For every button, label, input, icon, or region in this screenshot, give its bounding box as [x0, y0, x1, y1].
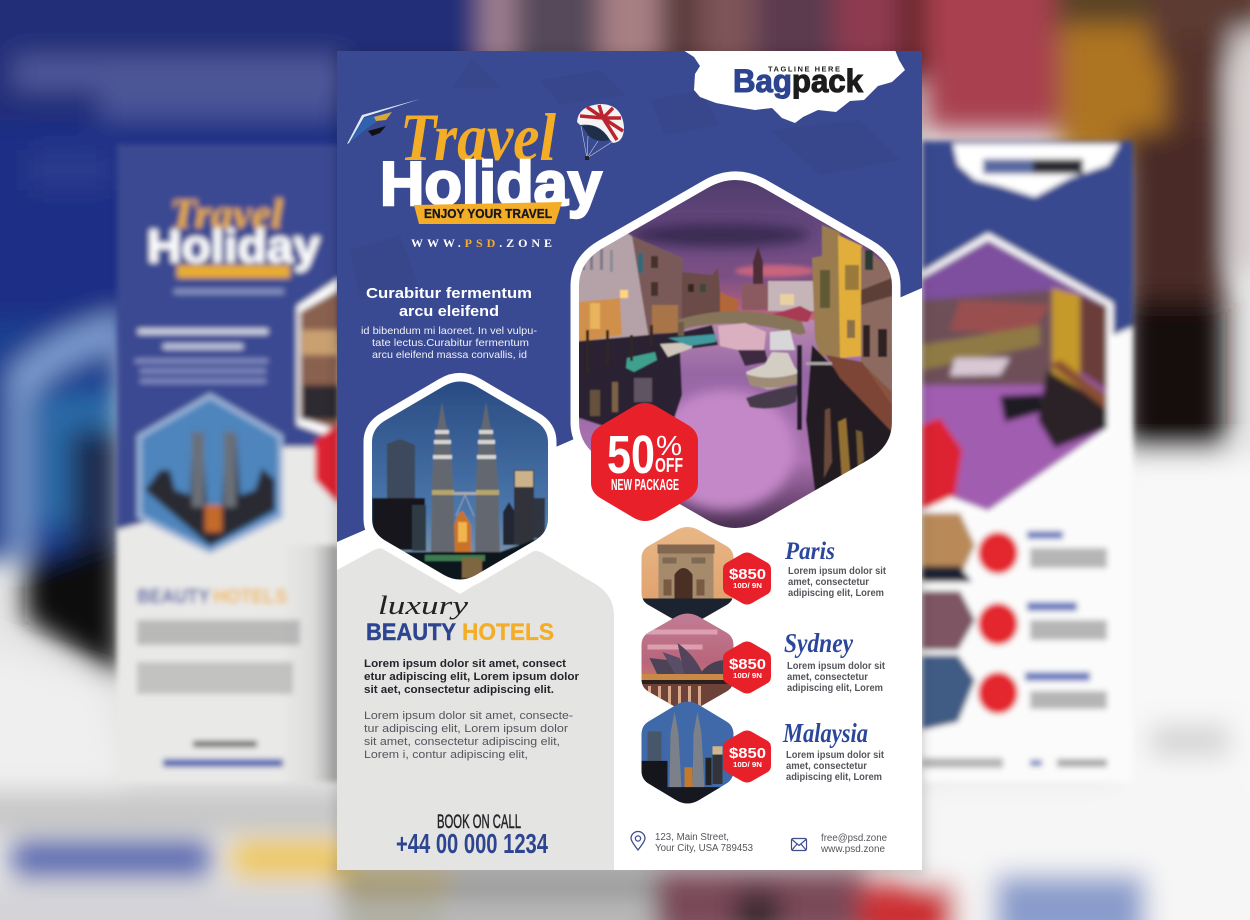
photo: Venice canal (big hexagon) [570, 170, 900, 535]
hotels bold text [364, 658, 580, 696]
photo: Arc de Triomphe [642, 527, 734, 619]
blurred left flyer: Travel [170, 192, 283, 238]
photo: Petronas towers (small hexagon) [360, 370, 560, 590]
price badge: Malaysia: 10D/ 9N [733, 760, 762, 769]
badge: 50% off [591, 403, 698, 521]
price badge: Malaysia: $850 [729, 746, 766, 762]
boat [746, 352, 799, 389]
blurred right flyer [922, 141, 1133, 782]
main flyer [337, 50, 922, 870]
heading: luxury script: luxury [378, 591, 469, 620]
email and web [820, 833, 888, 855]
destination: Paris: Lorem ipsum dolor sit [788, 566, 887, 577]
destination: Sydney [784, 628, 886, 694]
icon: envelope [792, 838, 806, 850]
hotels body text: Lorem ipsum dolor sit amet, consecte- [364, 710, 573, 722]
email and web: www.psd.zone [820, 844, 886, 855]
flyer shadow [333, 48, 926, 874]
hotels bold text: etur adipiscing elit, Lorem ipsum dolor [364, 671, 580, 683]
booking call to action: BOOK ON CALL [437, 811, 521, 833]
right brown building [860, 246, 892, 392]
intro body text: tate lectus.Curabitur fermentum [372, 337, 529, 349]
torn white logo patch [683, 50, 905, 123]
banner: enjoy your travel: ENJOY YOUR TRAVEL [424, 207, 552, 221]
website: WWW. PSD .ZONE [411, 236, 552, 250]
heading: beauty hotels: BEAUTY [366, 619, 456, 646]
hotels body text: sit amet, consectetur adipiscing elit, [364, 736, 560, 748]
destination: Malaysia: adipiscing elit, Lorem [786, 772, 882, 783]
address: Your City, USA 789453 [655, 843, 754, 854]
yellow building [812, 225, 840, 358]
heading: beauty hotels: HOTELS [462, 619, 554, 646]
intro body text: arcu eleifend massa convallis, id [372, 349, 527, 361]
hotels body text: Lorem i, contur adipiscing elit, [364, 749, 528, 761]
left dock and reflections [579, 324, 718, 426]
embankment and dark reflections [806, 345, 892, 492]
booking call to action [396, 814, 548, 854]
destination: Sydney: adipiscing elit, Lorem [787, 683, 883, 694]
destination: Malaysia [782, 718, 885, 783]
blurred left flyer [117, 144, 339, 782]
pale water under bridge [718, 323, 766, 350]
buildings left [579, 233, 649, 342]
logo tagline: TAGLINE HERE [768, 64, 840, 74]
bridge [677, 311, 806, 335]
small boats [626, 352, 657, 372]
destination: Paris: amet, consectetur [788, 577, 869, 588]
hotels body text [364, 710, 573, 761]
destination: Malaysia: Lorem ipsum dolor sit [786, 750, 885, 761]
email and web: free@psd.zone [821, 833, 888, 844]
badge: 50% off: OFF [655, 455, 683, 477]
price badge: Sydney: 10D/ 9N [733, 671, 762, 680]
destination: Paris: adipiscing elit, Lorem [788, 588, 884, 599]
church tower [752, 246, 764, 285]
badge: 50% off: % [656, 430, 682, 461]
booking call to action: +44 00 000 1234 [396, 828, 548, 859]
photo: Kuala Lumpur [642, 702, 734, 804]
logo wordmark: Bagpack [733, 63, 863, 99]
icon: hang glider [347, 99, 420, 144]
hotels body text: tur adipiscing elit, Lorem ipsum dolor [364, 723, 568, 735]
heading: beauty hotels [367, 623, 554, 640]
grey panel: luxury hotels [337, 548, 614, 870]
address [655, 832, 754, 854]
blurred left flyer: Holiday [147, 220, 320, 272]
intro heading: arcu eleifend [399, 303, 499, 320]
destination: Malaysia: Malaysia [782, 718, 868, 748]
logo [683, 50, 905, 123]
address: 123, Main Street, [655, 832, 729, 843]
price badge: Paris: 10D/ 9N [733, 581, 762, 590]
destination: Paris [784, 538, 887, 599]
destination: Sydney: Lorem ipsum dolor sit [787, 661, 886, 672]
destination: Sydney: Sydney [784, 628, 854, 658]
icon: parachute [577, 104, 624, 160]
flyer paper [337, 288, 922, 870]
faint map texture [350, 58, 900, 300]
photo: Sydney Opera House [642, 614, 734, 706]
hotels bold text: sit aet, consectetur adipiscing elit. [364, 684, 554, 696]
intro heading [366, 287, 531, 316]
blue header panel [337, 51, 922, 542]
icon: location pin [631, 832, 645, 850]
price badge: Sydney [723, 642, 771, 694]
badge: 50% off: NEW PACKAGE [611, 477, 679, 494]
intro body text: id bibendum mi laoreet. In vel vulpu- [361, 325, 538, 337]
intro body text [361, 325, 538, 361]
destination: Paris: Paris [784, 538, 835, 565]
title: Travel: Travel [400, 99, 556, 175]
price badge: Malaysia [723, 730, 771, 782]
price badge: Paris [723, 552, 771, 604]
price badge: Paris: $850 [729, 567, 766, 583]
price badge: Sydney: $850 [729, 657, 766, 673]
destination: Malaysia: amet, consectetur [786, 761, 867, 772]
intro heading: Curabitur fermentum [366, 285, 532, 302]
blurred left flyer: BEAUTY [137, 586, 211, 608]
hotels bold text: Lorem ipsum dolor sit amet, consect [364, 658, 566, 670]
destination: Sydney: amet, consectetur [787, 672, 868, 683]
banner: enjoy your travel [414, 202, 562, 224]
title: Holiday: Holiday [380, 150, 603, 219]
blurred left flyer: HOTELS [213, 586, 287, 608]
badge: 50% off: 50 [607, 425, 655, 485]
